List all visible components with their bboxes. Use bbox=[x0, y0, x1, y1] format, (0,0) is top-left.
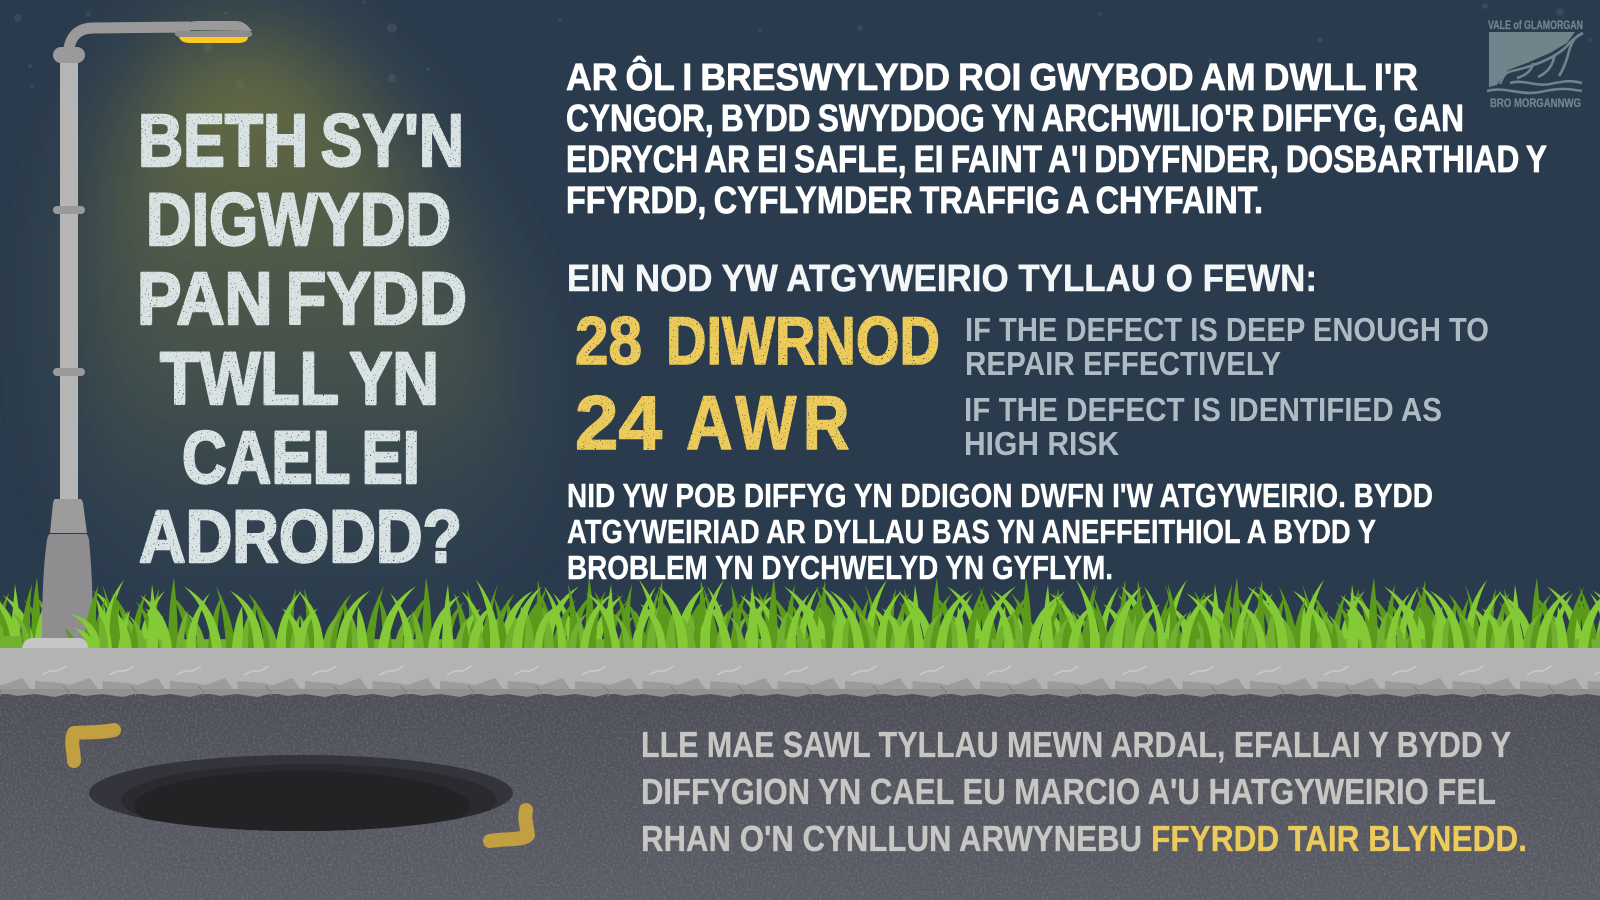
stat: 24 hours: AWR bbox=[686, 381, 856, 466]
stat: 24 hours bbox=[575, 381, 856, 466]
icon: Vale of Glamorgan logo: BRO MORGANNWG bbox=[1490, 98, 1581, 110]
title: DIGWYDD bbox=[146, 178, 451, 261]
icon: street lamp bbox=[42, 21, 252, 640]
text block: shallow repairs note: BROBLEM YN DYCHWELYD YN GYFLYM. bbox=[567, 549, 1113, 586]
title: CAEL EI bbox=[182, 416, 420, 499]
heading: repair aim: EIN NOD YW ATGYWEIRIO TYLLAU O FEWN: bbox=[567, 258, 1317, 300]
text block: three-year plan bbox=[641, 724, 1527, 859]
kerb bbox=[0, 648, 1600, 700]
title: TWLL YN bbox=[160, 337, 439, 420]
grass in front of lamp bbox=[0, 586, 130, 649]
stat: 28 days: 28 bbox=[575, 303, 642, 379]
icon: Vale of Glamorgan logo bbox=[1487, 20, 1583, 110]
icon: pothole bbox=[89, 755, 513, 831]
text block: shallow repairs note: ATGYWEIRIAD AR DYLLAU BAS YN ANEFFEITHIOL A BYDD Y bbox=[567, 513, 1376, 550]
text: 24 hour condition: IF THE DEFECT IS IDENTIFIED AS bbox=[964, 391, 1442, 428]
text: 28 day condition: REPAIR EFFECTIVELY bbox=[965, 345, 1281, 382]
road surface bbox=[0, 688, 1600, 900]
icon: top-left spray mark bbox=[72, 730, 114, 761]
stat: 28 days bbox=[575, 303, 940, 379]
title: BETH SY'N bbox=[138, 99, 464, 182]
text: 24 hour condition bbox=[964, 391, 1442, 462]
text: 28 day condition bbox=[965, 311, 1489, 382]
stat: 28 days: DIWRNOD bbox=[666, 303, 940, 379]
text block: inspection paragraph: AR ÔL I BRESWYLYDD ROI GWYBOD AM DWLL I'R bbox=[566, 54, 1418, 99]
text block: three-year plan: FFYRDD TAIR BLYNEDD. bbox=[1151, 818, 1527, 859]
icon: bottom-right spray mark bbox=[490, 810, 528, 841]
text block: inspection paragraph: FFYRDD, CYFLYMDER TRAFFIG A CHYFAINT. bbox=[566, 180, 1263, 222]
text block: inspection paragraph bbox=[566, 54, 1547, 222]
title: PAN FYDD bbox=[137, 257, 467, 340]
text: 24 hour condition: HIGH RISK bbox=[964, 425, 1119, 462]
street light glow bbox=[85, 40, 510, 640]
background: night sky bbox=[0, 0, 1600, 660]
grass bbox=[0, 578, 1600, 649]
text: 28 day condition: IF THE DEFECT IS DEEP ENOUGH TO bbox=[965, 311, 1489, 348]
text block: three-year plan: RHAN O'N CYNLLUN ARWYNEBU bbox=[641, 818, 1142, 859]
title bbox=[137, 99, 467, 578]
stat: 24 hours: 24 bbox=[575, 381, 662, 466]
text block: shallow repairs note: NID YW POB DIFFYG YN DDIGON DWFN I'W ATGYWEIRIO. BYDD bbox=[567, 477, 1433, 514]
text block: shallow repairs note bbox=[567, 477, 1433, 586]
title: ADRODD? bbox=[139, 495, 462, 578]
stars bbox=[14, 0, 1592, 145]
